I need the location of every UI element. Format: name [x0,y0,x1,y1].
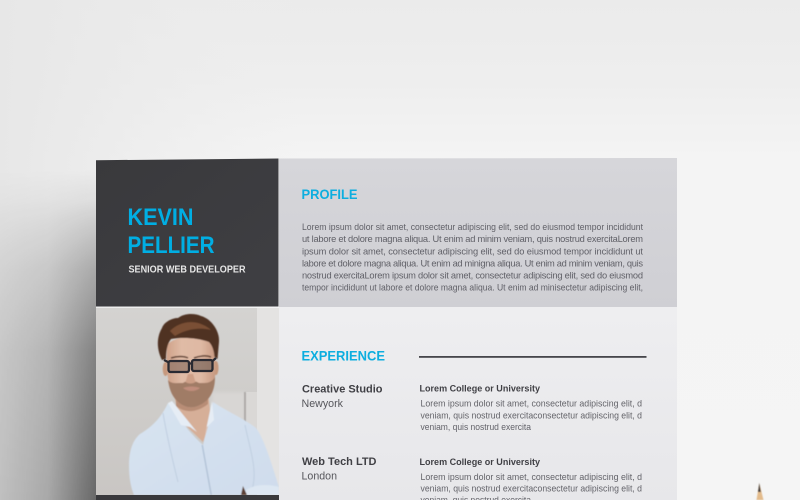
entry: web tech: Web Tech LTD [302,456,376,468]
mouth [183,386,200,391]
background [0,178,96,500]
brows [171,356,211,358]
shirt creases [163,413,254,490]
profile text: labore et dolore magna aliqua. Ut enim ad minigna aliqua. Ut enim ad minim veniam, quis [302,258,643,268]
nose [186,374,196,384]
beard [168,377,215,407]
job title: SENIOR WEB DEVELOPER [128,264,246,276]
profile text: ipsum dolor sit amet, consectetur adipiscing elit, sed do eiusmod tempor incididunt ut [302,246,643,256]
pencil [756,483,764,500]
entry: web tech: veniam, quis nostrud exercitaconsectetur adipiscing elit, d [420,484,642,494]
resume mockup scene [0,158,764,500]
face [166,337,216,384]
profile text: tempor incididunt ut labore et dolore magna aliqua. Ut enim ad minisectetur adipiscing elit, [302,282,643,292]
panel: profile [279,158,677,307]
entry: creative studio: veniam, quis nostrud exercita [420,422,532,432]
hair [158,314,219,360]
section rule [419,356,646,358]
entry: web tech: Lorem College or University [420,457,541,468]
entry: web tech: Lorem ipsum dolor sit amet, consectetur adipiscing elit, d [420,472,642,482]
glasses [164,358,216,372]
profile text: Lorem ipsum dolor sit amet, consectetur adipiscing elit, sed do eiusmod tempor incididunt [302,222,643,232]
entry: web tech [302,456,642,500]
entry: creative studio: Creative Studio [302,384,383,396]
profile text [302,222,643,292]
ears [163,362,168,376]
entry: creative studio: Lorem College or University [420,384,541,395]
panel: experience [302,348,646,500]
entry: creative studio: veniam, quis nostrud exercitaconsectetur adipiscing elit, d [420,410,642,420]
profile text: ut labore et dolore magna aliqua. Ut enim ad minim veniam, quis nostrud exercitaLorem [302,234,643,244]
heading: profile: PROFILE [302,186,358,202]
resume page [96,158,677,500]
heading: first name: KEVIN [128,204,194,231]
entry: creative studio [302,384,642,432]
shirt [129,402,279,495]
entry: creative studio: Newyork [302,398,343,410]
collar [168,401,197,432]
profile text: nostrud exercitaLorem ipsum dolor sit amet, consectetur adipiscing elit, sed do eiusmod [302,270,643,280]
photo border strip [96,495,279,500]
photo: man with glasses [96,308,279,495]
heading: last name: PELLIER [128,232,215,259]
placket [202,445,212,495]
entry: web tech: London [302,470,337,482]
heading: experience: EXPERIENCE [302,348,385,364]
neck [174,398,210,442]
entry: creative studio: Lorem ipsum dolor sit amet, consectetur adipiscing elit, d [420,399,642,409]
panel: name header [96,158,278,306]
page body [279,307,677,500]
